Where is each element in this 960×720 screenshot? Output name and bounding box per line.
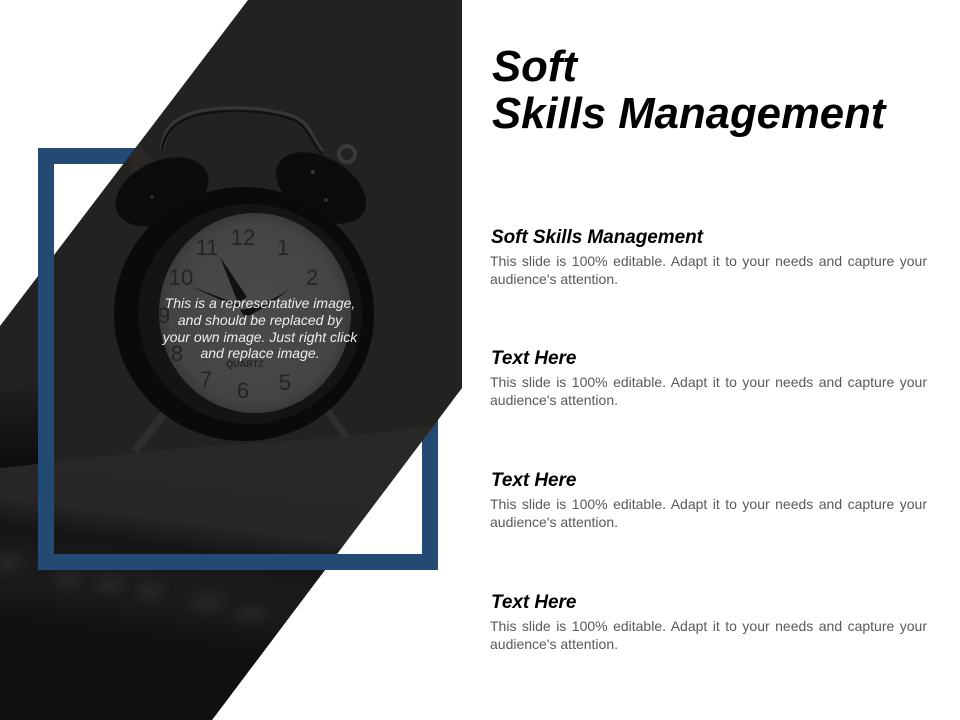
clock numerals: 11: [196, 235, 218, 260]
clock body: [114, 187, 374, 441]
clock numerals: 5: [279, 370, 291, 395]
clock hands: [190, 257, 290, 317]
text block: soft skills management: Soft Skills Management: [491, 227, 703, 248]
clock numerals: 10: [169, 265, 193, 290]
clapper post: [127, 144, 152, 173]
text block: text here 2: This slide is 100% editable. Adapt it to your needs and capture your audience's attention.: [490, 496, 927, 530]
image placeholder caption: your own image. Just right click: [163, 329, 357, 345]
clock numerals: 8: [171, 341, 183, 366]
clock numerals: 9: [158, 303, 170, 328]
text block: text here 3: Text Here: [491, 592, 576, 613]
text block: soft skills management: This slide is 100% editable. Adapt it to your needs and capture your audience's attention.: [490, 253, 927, 287]
text block: text here 1: This slide is 100% editable. Adapt it to your needs and capture your audience's attention.: [490, 374, 927, 408]
clock legs: [135, 410, 347, 451]
dark angled photo panel: [0, 0, 462, 720]
image placeholder caption: This is a representative image,: [165, 295, 355, 311]
text block: text here 2: Text Here: [491, 470, 576, 491]
clock numerals: 1: [277, 235, 289, 260]
text block: text here 2: [490, 470, 927, 530]
photo: dark left background: [0, 409, 38, 468]
clock numerals: [158, 225, 318, 403]
clock handle: [162, 109, 322, 154]
title: Soft: [492, 42, 577, 91]
frame: back edges (top and right): [38, 148, 438, 570]
image placeholder caption: [162, 295, 358, 361]
text block: text here 1: [490, 348, 927, 408]
text block: soft skills management: [490, 227, 927, 287]
representative photo with frame: [0, 0, 462, 720]
image placeholder caption: and should be replaced by: [178, 312, 342, 328]
clock numerals: 6: [237, 378, 249, 403]
photo: table surface: [0, 420, 462, 720]
clock bells: [116, 144, 366, 226]
clock numerals: 2: [306, 265, 318, 290]
title: [492, 42, 887, 138]
image placeholder caption: and replace image.: [200, 345, 320, 361]
clock numerals: 7: [200, 367, 212, 392]
clock numerals: QUARTZ: [226, 359, 264, 369]
frame: front edges (left and bottom): [38, 148, 438, 570]
text block: text here 1: Text Here: [491, 348, 576, 369]
clock face: [159, 213, 351, 413]
text block: text here 3: [490, 592, 927, 652]
clock numerals: 12: [231, 225, 255, 250]
text block: text here 3: This slide is 100% editable. Adapt it to your needs and capture your audience's attention.: [490, 618, 927, 652]
title: Skills Management: [492, 89, 885, 138]
photo: alarm clock: [105, 109, 378, 451]
